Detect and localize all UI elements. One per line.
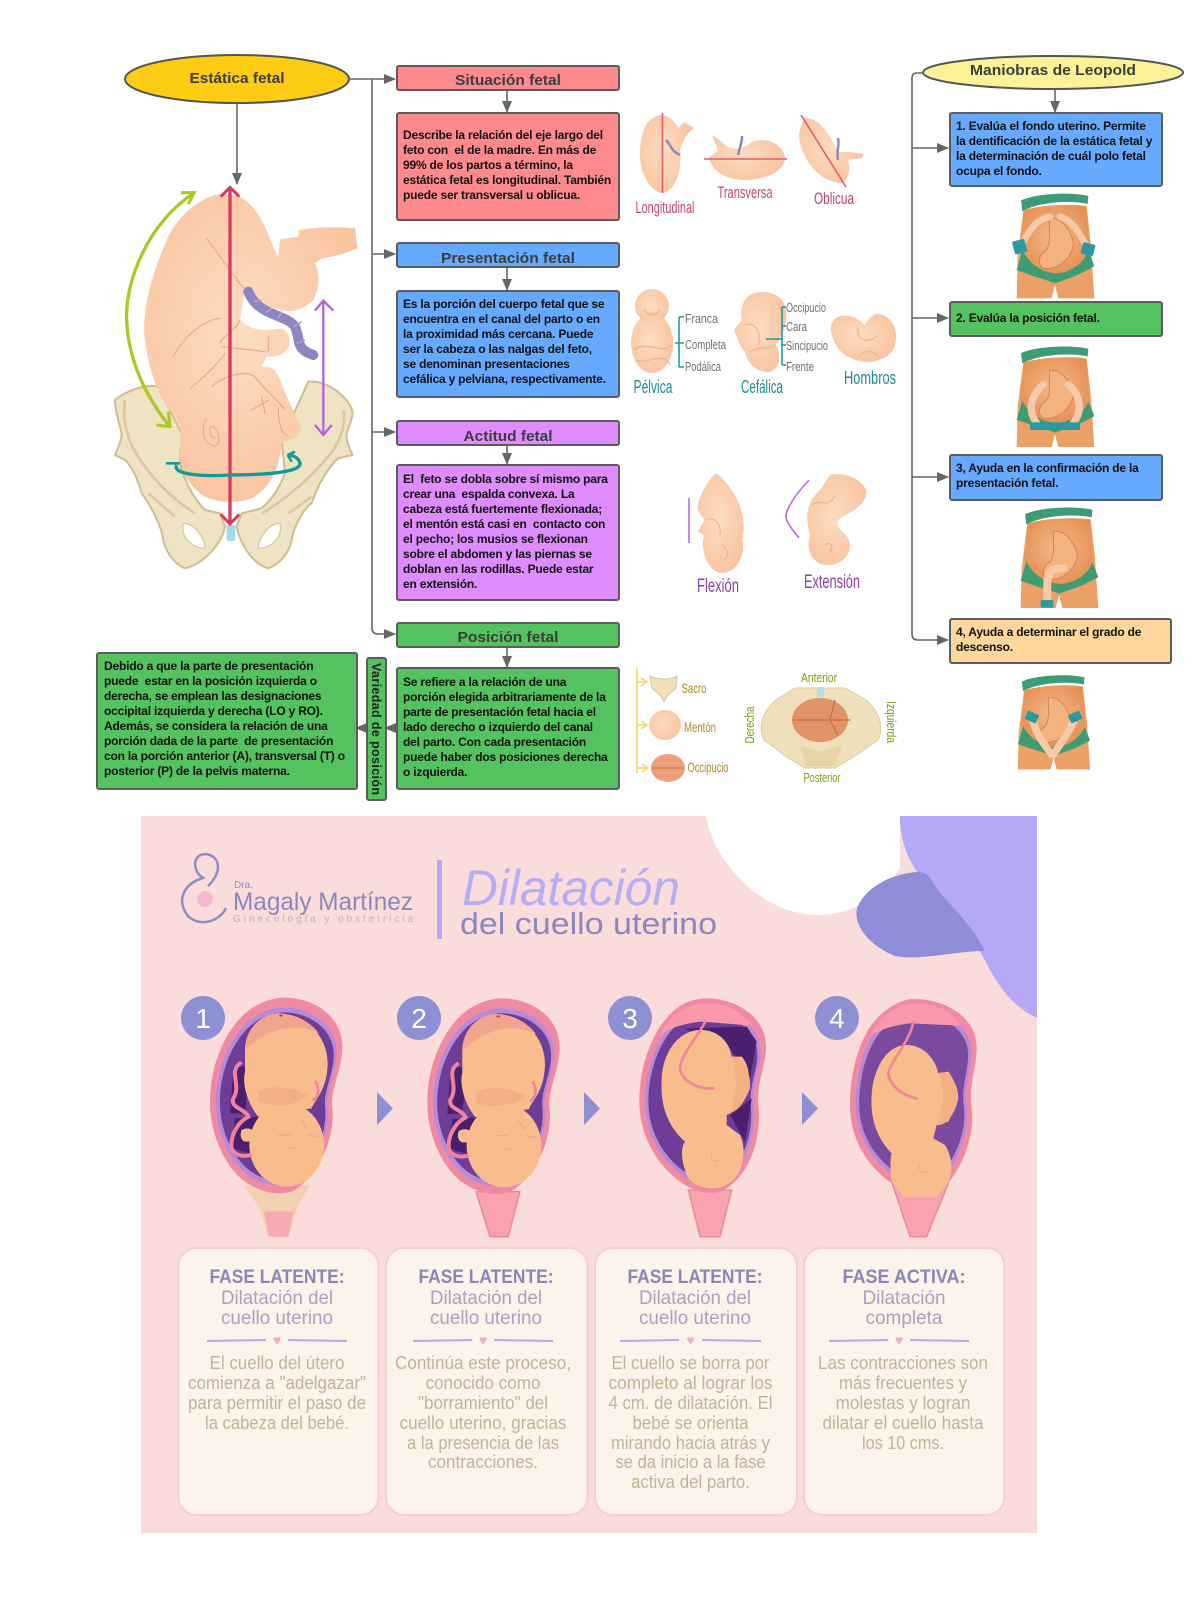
panel: Posición fetal: Posición fetal <box>458 629 558 646</box>
panel: Presentación fetal: ser la cabeza o las nalgas del feto, <box>403 342 592 356</box>
illustration: Transversa <box>704 135 787 202</box>
card 1 <box>178 1248 378 1515</box>
panel: Actitud fetal: crear una espalda convexa. La <box>403 487 575 501</box>
card 3: bebé se orienta <box>632 1413 749 1433</box>
panel: Actitud fetal: doblan en las rodillas. Puede estar <box>403 562 594 576</box>
panel: Leopold step 1 <box>950 113 1162 186</box>
panel: Leopold step 4: 4, Ayuda a determinar el grado de <box>956 625 1142 639</box>
illustration: Cefálica with subtypes <box>734 292 828 397</box>
panel: Leopold step 3 <box>950 455 1162 500</box>
card 3: El cuello se borra por <box>612 1353 770 1373</box>
logo: Dra. Magaly Martínez: Ginecología y obstetricia <box>233 914 413 925</box>
card 4: Las contracciones son <box>818 1353 988 1373</box>
arrow 2 <box>584 1092 600 1125</box>
panel: Actitud fetal: El feto se dobla sobre sí mismo para <box>403 472 608 486</box>
card 1: comienza a "adelgazar" <box>188 1373 366 1393</box>
illustration: Flexión <box>689 473 744 597</box>
card 4: los 10 cms. <box>862 1433 944 1453</box>
panel: variedad de posición explanation: porción dada de la parte de presentación <box>104 734 333 748</box>
illustration: Sacro, Mentón, Occipucio key <box>637 668 729 782</box>
illustration: Cefálica with subtypes: Frente <box>786 359 814 374</box>
panel: variedad de posición explanation: con la porción anterior (A), transversal (T) o <box>104 749 345 763</box>
step badge 1 <box>181 996 225 1040</box>
card 4: completa <box>866 1308 943 1329</box>
panel: Posición fetal: Se refiere a la relación de una <box>403 675 567 689</box>
uterus illustration 3 <box>639 998 766 1237</box>
panel: Posición fetal: lado derecho o izquierdo del canal <box>403 720 593 734</box>
illustration: pelvis with fetal head and orientation labels: Izquierda <box>884 701 899 744</box>
panel: Posición fetal: puede haber dos posiciones derecha <box>403 750 608 764</box>
illustration: Cefálica with subtypes: Cefálica <box>741 377 784 397</box>
illustration: Flexión: Flexión <box>697 576 739 597</box>
panel: variedad de posición explanation: posterior (P) de la pelvis materna. <box>104 764 290 778</box>
card 2: cuello uterino <box>430 1308 542 1329</box>
panel: Leopold step 1: la dentificación de la estática fetal y <box>956 134 1153 148</box>
panel: Situación fetal: feto con el de la madre. En más de <box>403 143 597 157</box>
illustration: Cefálica with subtypes: Sincipucio <box>786 338 828 353</box>
card 4: molestas y logran <box>836 1393 970 1413</box>
title node: Estática fetal: Estática fetal <box>190 70 284 87</box>
heading: Dilatación del cuello uterino <box>460 860 717 941</box>
panel: Presentación fetal: cefálica y pelviana, respectivamente. <box>403 372 606 386</box>
illustration: Sacro, Mentón, Occipucio key: Occipucio <box>688 759 729 775</box>
panel: Actitud fetal: el mentón está casi en contacto con <box>403 517 605 531</box>
illustration: Leopold maneuver 2 <box>1017 346 1094 447</box>
panel: Situación fetal <box>397 66 619 220</box>
panel: Actitud fetal: sobre el abdomen y las piernas se <box>403 547 592 561</box>
illustration: Pélvica with subtypes: Pélvica <box>634 377 673 397</box>
card 3: cuello uterino <box>639 1308 751 1329</box>
illustration: pelvis with fetal head and orientation labels: Posterior <box>804 770 841 785</box>
illustration: Oblicua: Oblicua <box>814 189 854 208</box>
panel: dilatación background <box>141 816 1037 1533</box>
illustration: Extensión: Extensión <box>804 572 860 593</box>
panel: Presentación fetal: Presentación fetal <box>441 250 575 267</box>
panel: Actitud fetal: el pecho; los musios se flexionan <box>403 532 588 546</box>
card 3: se da inicio a la fase <box>616 1452 766 1472</box>
arrow 1 <box>377 1092 393 1125</box>
card 4: ♥ <box>895 1332 903 1348</box>
panel: Posición fetal: parte de presentación fetal hacia el <box>403 705 596 719</box>
illustration: Oblicua <box>799 115 864 208</box>
card 4: dilatar el cuello hasta <box>822 1413 984 1433</box>
panel: Actitud fetal: en extensión. <box>403 577 477 591</box>
illustration: pelvis with fetal head and orientation labels: Derecha <box>742 706 757 744</box>
label: Variedad de posición <box>367 658 386 800</box>
step badge 3: 3 <box>622 1003 638 1034</box>
panel: Presentación fetal: encuentra en el canal del parto o en <box>403 312 600 326</box>
step badge 2: 2 <box>411 1003 427 1034</box>
panel: Situación fetal: puede ser transversal u oblicua. <box>403 188 580 202</box>
illustration: Longitudinal: Longitudinal <box>636 198 694 217</box>
panel: Situación fetal: 99% de los partos a término, la <box>403 158 573 172</box>
label: Variedad de posición: Variedad de posición <box>369 663 383 795</box>
step badge 4: 4 <box>829 1003 845 1034</box>
card 3: ♥ <box>686 1332 695 1348</box>
card 3: 4 cm. de dilatación. El <box>608 1393 772 1413</box>
panel: Leopold step 2: 2. Evalúa la posición fetal. <box>956 311 1100 325</box>
card 1: Dilatación del <box>221 1288 333 1309</box>
illustration: Sacro, Mentón, Occipucio key: Mentón <box>684 719 716 735</box>
panel: Posición fetal: del parto. Con cada presentación <box>403 735 586 749</box>
illustration: pelvis with fetal head and orientation labels: Anterior <box>801 670 838 685</box>
step badge 2 <box>397 996 441 1040</box>
uterus illustration 2 <box>427 998 560 1237</box>
panel: variedad de posición explanation: Además, se considera la relación de una <box>104 719 328 733</box>
card 1: El cuello del útero <box>210 1353 344 1373</box>
card 3: Dilatación del <box>639 1288 751 1309</box>
illustration: Pélvica with subtypes: Franca <box>685 311 719 326</box>
panel: Leopold step 4: descenso. <box>956 640 1013 654</box>
illustration: Hombros <box>831 314 896 388</box>
step badge 3 <box>608 996 652 1040</box>
card 2: Dilatación del <box>430 1288 542 1309</box>
card 2: cuello uterino, gracias <box>400 1413 566 1433</box>
card 3 <box>595 1248 797 1515</box>
panel: Leopold step 1: 1. Evalúa el fondo uterino. Permite <box>956 119 1146 133</box>
panel: Leopold step 4 <box>950 619 1171 663</box>
panel: Leopold step 3: presentación fetal. <box>956 476 1058 490</box>
illustration: Extensión <box>786 474 866 593</box>
connector arrows: main trunk to section headings <box>237 79 507 728</box>
panel: Presentación fetal: la proximidad más cercana. Puede <box>403 327 594 341</box>
illustration: Leopold maneuver 4 <box>1018 675 1090 770</box>
panel: Situación fetal: Situación fetal <box>455 72 561 89</box>
panel: Situación fetal: Describe la relación del eje largo del <box>403 128 603 142</box>
illustration: Hombros: Hombros <box>844 368 896 388</box>
logo: Dra. Magaly Martínez <box>182 854 413 925</box>
panel: Posición fetal: o izquierda. <box>403 765 467 779</box>
card 4: más frecuentes y <box>839 1373 967 1393</box>
logo: Dra. Magaly Martínez: Dra. <box>234 880 253 891</box>
panel: Leopold step 1: ocupa el fondo. <box>956 164 1042 178</box>
panel: Leopold step 2 <box>950 302 1162 336</box>
illustration: Leopold maneuver 1 <box>1012 194 1096 298</box>
illustration: Leopold maneuver 3 <box>1021 507 1098 608</box>
step badge 1: 1 <box>195 1003 211 1034</box>
card 4: Dilatación <box>862 1288 946 1309</box>
panel: Leopold step 1: la determinación de cuál polo fetal <box>956 149 1146 163</box>
title node: Maniobras de Leopold: Maniobras de Leopold <box>970 62 1136 79</box>
panel: Presentación fetal: se denominan presentaciones <box>403 357 570 371</box>
panel: variedad de posición explanation: Debido a que la parte de presentación <box>104 659 313 673</box>
card 2: "borramiento" del <box>418 1393 548 1413</box>
card 1: para permitir el paso de <box>188 1393 366 1413</box>
panel: Presentación fetal: Es la porción del cuerpo fetal que se <box>403 297 605 311</box>
card 1: la cabeza del bebé. <box>205 1413 349 1433</box>
card 2: ♥ <box>479 1332 487 1348</box>
card 2: a la presencia de las <box>407 1433 559 1453</box>
card 3: mirando hacia atrás y <box>611 1433 770 1453</box>
illustration: Longitudinal <box>636 113 694 217</box>
card 2 <box>386 1248 588 1515</box>
panel: Actitud fetal: Actitud fetal <box>464 428 552 445</box>
connector arrows: Leopold trunk <box>912 73 1055 640</box>
illustration: pelvis with fetal head and orientation labels <box>742 670 899 785</box>
card 1: cuello uterino <box>221 1308 333 1329</box>
illustration: Pélvica with subtypes <box>631 289 727 397</box>
card 3: activa del parto. <box>631 1472 750 1492</box>
arrow 3 <box>802 1092 818 1125</box>
panel: variedad de posición explanation: derecha, se emplean las designaciones <box>104 689 322 703</box>
title node: Maniobras de Leopold <box>923 56 1183 89</box>
step badge 4 <box>815 996 859 1040</box>
panel: Leopold step 3: 3, Ayuda en la confirmación de la <box>956 461 1139 475</box>
title node: Estática fetal <box>125 55 349 103</box>
panel: Presentación fetal <box>397 243 619 397</box>
card 1: ♥ <box>273 1332 281 1348</box>
panel: Situación fetal: estática fetal es longitudinal. También <box>403 173 611 187</box>
card 3: completo al lograr los <box>608 1373 772 1393</box>
heading: Dilatación del cuello uterino: del cuello uterino <box>460 906 717 941</box>
panel: Actitud fetal <box>397 421 619 600</box>
card 3: FASE LATENTE: <box>628 1267 762 1288</box>
illustration: Pélvica with subtypes: Completa <box>685 337 727 352</box>
card 2: contracciones. <box>428 1452 538 1472</box>
card 2: FASE LATENTE: <box>418 1267 554 1288</box>
uterus illustration 1 <box>210 998 342 1237</box>
heading: Dilatación del cuello uterino: Dilatación <box>462 860 680 916</box>
logo: Dra. Magaly Martínez: Magaly Martínez <box>233 888 413 916</box>
card 1: FASE LATENTE: <box>210 1267 344 1288</box>
panel: variedad de posición explanation: occipital izquierda y derecha (LO y RO). <box>104 704 323 718</box>
card 4: FASE ACTIVA: <box>842 1267 966 1288</box>
panel: Posición fetal <box>397 623 619 789</box>
card 2: Continúa este proceso, <box>395 1353 571 1373</box>
divider bar <box>437 860 442 939</box>
illustration: Cefálica with subtypes: Occipucio <box>786 300 826 315</box>
illustration: fetus in pelvis with axis arrows <box>115 187 357 568</box>
panel: variedad de posición explanation <box>97 653 357 789</box>
card 2: conocido como <box>426 1373 540 1393</box>
illustration: Sacro, Mentón, Occipucio key: Sacro <box>682 680 707 696</box>
illustration: Cefálica with subtypes: Cara <box>786 319 808 334</box>
panel: Posición fetal: porción elegida arbitrariamente de la <box>403 690 606 704</box>
uterus illustration 4 <box>850 999 977 1237</box>
panel: variedad de posición explanation: puede estar en la posición izquierda o <box>104 674 317 688</box>
illustration: Transversa: Transversa <box>718 183 773 202</box>
panel: Actitud fetal: cabeza está fuertemente flexionada; <box>403 502 602 516</box>
illustration: Pélvica with subtypes: Podálica <box>685 359 722 374</box>
card 4 <box>804 1248 1004 1515</box>
